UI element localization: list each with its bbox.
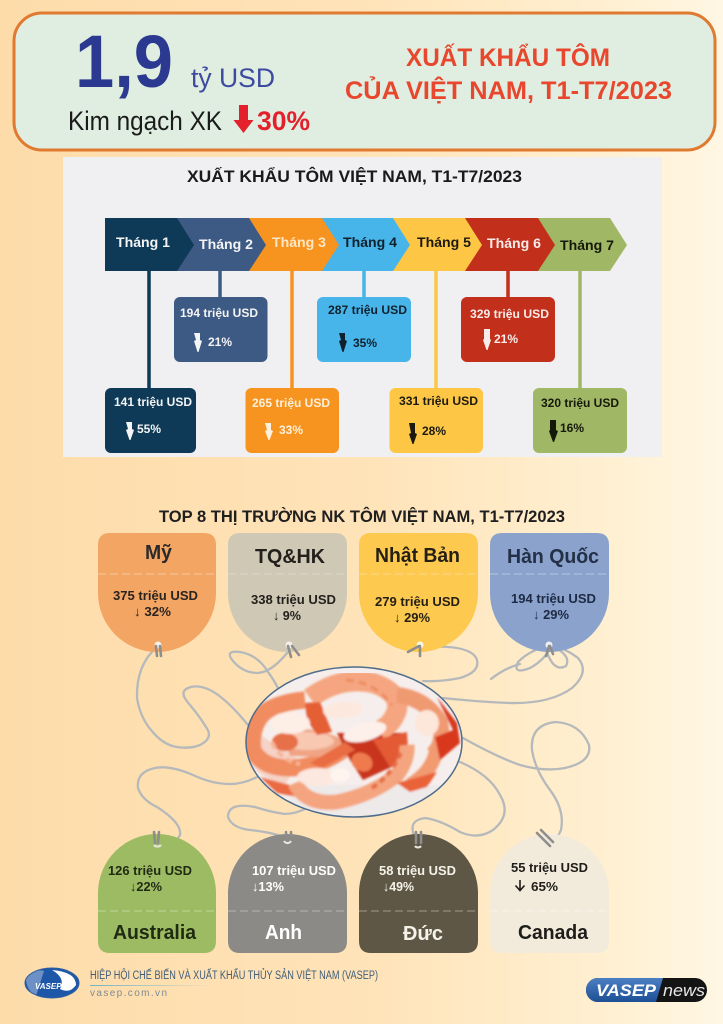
- footer: VASEP logo: VASEP: [35, 982, 62, 991]
- card: month 7: 320 triệu USD: [541, 396, 619, 410]
- month chevrons: [105, 218, 627, 271]
- footer: VASEP logo: [25, 968, 79, 998]
- month chevrons: Tháng 5: [417, 234, 471, 250]
- footer: organisation name: HIỆP HỘI CHẾ BIẾN VÀ XUẤT KHẨU THỦY SẢN VIỆT NAM (VASEP): [90, 969, 378, 982]
- tag: Anh: [228, 834, 347, 953]
- card: month 3: 33%: [279, 423, 303, 437]
- chart heading: XUẤT KHẨU TÔM VIỆT NAM, T1-T7/2023: [187, 167, 522, 186]
- card: month 1: 141 triệu USD: [114, 395, 192, 409]
- top tag clips: [154, 642, 553, 657]
- tag: Canada: [490, 834, 609, 953]
- panel: monthly exports: [63, 157, 662, 457]
- card: month 6: 21%: [494, 332, 518, 346]
- label: Kim ngạch XK: Kim ngạch XK: [68, 106, 222, 136]
- card: month 7: 16%: [560, 421, 584, 435]
- tag: Nhật Bản: [359, 533, 478, 652]
- tag: Anh: Anh: [265, 922, 302, 944]
- tag: Mỹ: ↓ 32%: [134, 604, 171, 619]
- tag: Hàn Quốc: ↓ 29%: [533, 607, 569, 622]
- change 30%: 30%: [257, 106, 310, 136]
- card: month 6: [461, 297, 555, 362]
- card: month 3: [246, 388, 339, 453]
- badge: VASEP news: [586, 978, 707, 1002]
- header title: XUẤT KHẨU TÔM: [406, 42, 610, 72]
- card: month 7: [533, 388, 627, 453]
- bottom tag clips: [154, 830, 553, 847]
- strings connecting tags to shrimp: [137, 645, 589, 846]
- card: month 2: 21%: [208, 335, 232, 349]
- tag: Hàn Quốc: [490, 533, 609, 652]
- tag: Mỹ: Mỹ: [145, 542, 173, 564]
- tag: Hàn Quốc: 194 triệu USD: [511, 591, 596, 606]
- tag: Australia: ↓22%: [130, 879, 162, 894]
- tag: TQ&HK: TQ&HK: [255, 546, 326, 568]
- tag: Đức: ↓49%: [383, 879, 414, 894]
- tag: TQ&HK: 338 triệu USD: [251, 592, 336, 607]
- tag: Hàn Quốc: Hàn Quốc: [507, 546, 599, 568]
- tag: Canada: 55 triệu USD: [511, 860, 588, 875]
- badge: VASEP news: news: [663, 981, 706, 1000]
- card: month 4: [317, 297, 411, 362]
- badge: VASEP news: VASEP: [596, 981, 657, 1000]
- card: month 5: 331 triệu USD: [399, 394, 478, 408]
- tag: Nhật Bản: ↓ 29%: [394, 610, 430, 625]
- tag: TQ&HK: [228, 533, 347, 652]
- photo: shrimp on ice: [246, 667, 462, 820]
- unit: tỷ USD: tỷ USD: [191, 63, 275, 93]
- icon: red down arrow: [234, 105, 254, 133]
- month chevrons: Tháng 2: [199, 236, 253, 252]
- card: month 6: 329 triệu USD: [470, 307, 549, 321]
- card: month 3: 265 triệu USD: [252, 396, 330, 410]
- card: month 2: [174, 297, 268, 362]
- tag: Đức: Đức: [403, 923, 443, 945]
- tag: Australia: Australia: [113, 922, 197, 944]
- month chevrons: Tháng 6: [487, 235, 541, 251]
- tag: Mỹ: [98, 533, 216, 652]
- month chevrons: Tháng 4: [343, 234, 397, 250]
- tag: Anh: 107 triệu USD: [252, 863, 336, 878]
- card: month 1: [105, 388, 196, 453]
- header title: [345, 42, 672, 105]
- tag: Australia: 126 triệu USD: [108, 863, 192, 878]
- card: month 5: [390, 388, 483, 453]
- headline figure 1,9: 1,9: [75, 20, 173, 103]
- month chevrons: Tháng 1: [116, 234, 170, 250]
- card: month 1: 55%: [137, 422, 161, 436]
- heading: top 8 markets: TOP 8 THỊ TRƯỜNG NK TÔM VIỆT NAM, T1-T7/2023: [159, 507, 565, 526]
- month chevrons: Tháng 7: [560, 237, 614, 253]
- tag: Mỹ: 375 triệu USD: [113, 588, 198, 603]
- card: month 5: 28%: [422, 424, 446, 438]
- tag: Australia: [98, 834, 216, 953]
- tag: TQ&HK: ↓ 9%: [273, 608, 301, 623]
- tag: Nhật Bản: 279 triệu USD: [375, 594, 460, 609]
- connector lines: [149, 271, 580, 389]
- card: month 4: 35%: [353, 336, 377, 350]
- card: month 2: 194 triệu USD: [180, 306, 258, 320]
- header panel: [14, 13, 715, 150]
- tag: Đức: 58 triệu USD: [379, 863, 456, 878]
- tag: Canada: Canada: [518, 922, 589, 944]
- footer: website: vasep.com.vn: [90, 988, 167, 999]
- tag: Canada: 65%: [531, 879, 558, 894]
- tag: Nhật Bản: Nhật Bản: [375, 545, 460, 567]
- card: month 4: 287 triệu USD: [328, 303, 407, 317]
- tag: Anh: ↓13%: [252, 879, 284, 894]
- header title: CỦA VIỆT NAM, T1-T7/2023: [345, 75, 672, 105]
- month chevrons: Tháng 3: [272, 234, 326, 250]
- tag: Đức: [359, 834, 478, 953]
